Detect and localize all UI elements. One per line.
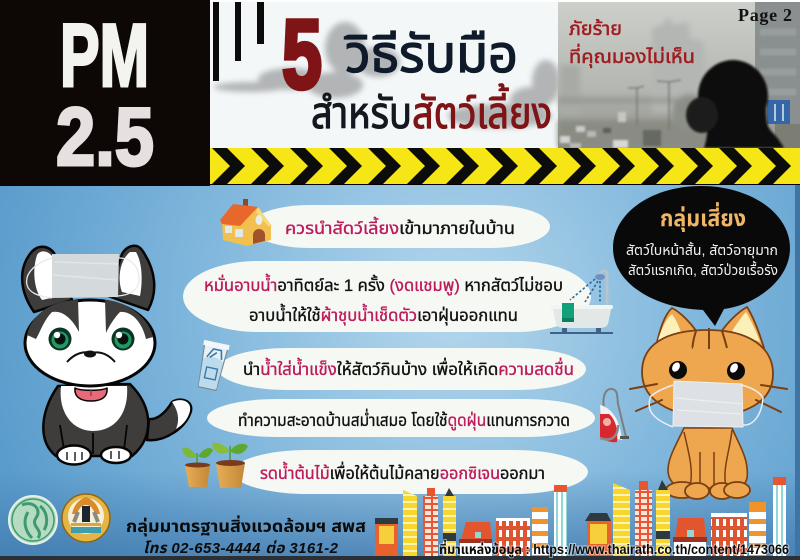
logo: gold seal xyxy=(62,494,110,542)
stripes xyxy=(693,328,727,349)
tip 4 text: ทำความสะอาดบ้านสม่ำเสมอ โดยใช้ดูดฝุ่นแทนการกวาด xyxy=(238,408,570,432)
left tower cluster xyxy=(375,523,398,560)
photo: smog city xyxy=(558,2,800,148)
illustration: city skyline xyxy=(375,477,786,560)
numeral 5: 5 xyxy=(282,0,322,109)
ears xyxy=(22,247,72,312)
body xyxy=(668,428,747,488)
logo: green seal xyxy=(9,496,57,544)
panel: header xyxy=(210,0,800,148)
head xyxy=(25,300,155,386)
right tower cluster xyxy=(587,520,611,560)
bars xyxy=(213,2,264,81)
icon: house xyxy=(220,199,272,246)
panel: PM 2.5 title xyxy=(0,0,210,186)
paws xyxy=(666,482,750,499)
tip 2 line 1: หมั่นอาบน้ำอาทิตย์ละ 1 ครั้ง (งดแชมพู) หากสัตว์ไม่ชอบ xyxy=(204,273,563,297)
face mask xyxy=(673,381,743,427)
tongue xyxy=(75,388,107,401)
street lamps and cars xyxy=(560,80,681,148)
eyes xyxy=(48,328,134,350)
tip 5 text: รดน้ำต้นไม้เพื่อให้ต้นไม้คลายออกซิเจนออกมา xyxy=(260,461,545,483)
callout line 2: สัตว์แรกเกิด, สัตว์ป่วยเรื้อรัง xyxy=(628,260,778,278)
distant buildings xyxy=(558,17,748,148)
icon: bathtub and shower xyxy=(550,271,613,334)
footer: phone: โทร 02-653-4444 ต่อ 3161-2 xyxy=(143,540,339,557)
callout: risk group xyxy=(613,186,790,326)
caption: unseen danger: ภัยร้าย xyxy=(569,17,622,40)
callout line 1: สัตว์ใบหน้าสั้น, สัตว์อายุมาก xyxy=(626,241,778,259)
icon: glass of iced water xyxy=(195,340,230,391)
caption: you cannot see: ที่คุณมองไม่เห็น xyxy=(569,43,695,68)
heading: 2.5: 2.5 xyxy=(56,90,154,183)
panel: tips xyxy=(183,205,595,494)
paws xyxy=(57,446,91,464)
eyes xyxy=(669,361,745,380)
tip 5 pill xyxy=(233,450,588,494)
tip 2 pill xyxy=(183,261,591,332)
tip 1 text: ควรนำสัดว์เลี้ยง เข้ามาภายในบ้าน xyxy=(285,216,515,238)
hazard chevron band xyxy=(210,148,800,184)
illustration: dog with mask xyxy=(22,246,191,464)
mask on head xyxy=(52,254,119,298)
smoke xyxy=(214,22,560,128)
bottom strip xyxy=(0,556,800,560)
footer: department name: กลุ่มมาตรฐานสิ่งแวดล้อมฯ สพส xyxy=(126,515,366,537)
head xyxy=(642,330,773,416)
icon: potted plants xyxy=(182,443,248,488)
tip 2 line 2: อาบน้ำให้ใช้ผ้าชุบน้ำเช็ดตัวเอาฝุ่นออกแทน xyxy=(249,303,518,326)
muzzle xyxy=(67,352,115,362)
heading: five ways: วิธีรับมือ xyxy=(344,26,518,84)
illustration: cat with mask xyxy=(630,307,787,499)
tip 1 pill xyxy=(250,205,550,248)
icon: vacuum cleaner xyxy=(600,389,629,442)
right building xyxy=(755,2,800,148)
body xyxy=(43,384,148,456)
silhouette with mask xyxy=(686,60,784,148)
background xyxy=(0,185,800,560)
page label: Page 2 xyxy=(738,5,792,25)
tip 3 text: นำน้ำใส่น้ำแข็งให้สัตว์กินบ้าง เพื่อให้เกิดความสดชื่น xyxy=(243,357,574,379)
tip 4 pill xyxy=(207,399,595,437)
callout heading: กลุ่มเสี่ยง xyxy=(660,202,746,232)
heading: PM: PM xyxy=(60,5,149,105)
tail xyxy=(147,400,191,440)
heading: for pets: สำหรับสัตว์เลี้ยง xyxy=(311,83,552,138)
whiskers xyxy=(630,384,787,412)
ears xyxy=(656,308,697,346)
tip 3 pill xyxy=(218,348,586,390)
